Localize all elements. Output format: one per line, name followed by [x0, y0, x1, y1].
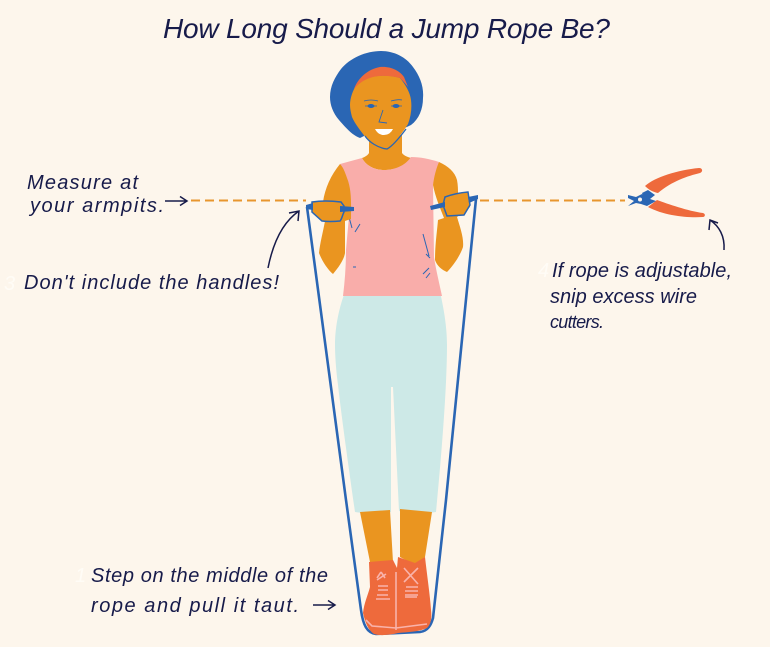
text: measure at armpits — [27, 172, 164, 217]
faint step numbers: 3 — [4, 273, 15, 295]
arrow: to armpit line — [165, 196, 187, 206]
neck — [362, 135, 411, 170]
faint step numbers — [4, 260, 549, 587]
right arm — [433, 162, 470, 272]
arrow: to handle — [268, 211, 299, 268]
text: measure at armpits: your armpits. — [28, 195, 164, 217]
nose — [379, 110, 387, 123]
text: step on rope note — [91, 565, 328, 617]
shirt — [340, 157, 442, 296]
arrow: to rope under foot — [313, 600, 335, 610]
text: step on rope note: rope and pull it taut. — [91, 595, 299, 617]
dashed measuring line — [191, 200, 625, 202]
arrow: to wire cutters — [709, 220, 724, 250]
face — [350, 76, 411, 148]
right handle and hand outline — [430, 192, 478, 216]
jump rope — [307, 199, 476, 634]
left arm — [312, 164, 351, 274]
shoes — [363, 557, 431, 635]
text: adjustable rope note: cutters. — [550, 312, 604, 332]
jaw line — [365, 129, 406, 149]
eyes and eyebrows — [364, 100, 402, 106]
text: handles note: Don't include the handles! — [24, 272, 279, 294]
text: measure at armpits: Measure at — [27, 172, 139, 194]
faint step numbers: 4 — [538, 260, 549, 282]
title: How Long Should a Jump Rope Be? — [163, 13, 610, 44]
text: step on rope note: Step on the middle of the — [91, 565, 328, 587]
legs — [360, 509, 432, 565]
hair — [330, 51, 423, 138]
figure: woman with jump rope — [306, 51, 478, 635]
icon: wire cutters — [628, 168, 705, 217]
text: adjustable rope note: If rope is adjustable, — [552, 260, 732, 282]
left handle and hand outline — [306, 201, 354, 222]
shoe laces and soles — [366, 568, 427, 630]
pants — [335, 292, 447, 514]
smile — [375, 129, 393, 135]
text: adjustable rope note — [550, 260, 732, 332]
faint step numbers: 1 — [75, 565, 86, 587]
headband — [354, 67, 408, 89]
text: adjustable rope note: snip excess wire — [550, 286, 697, 308]
shirt folds — [349, 217, 430, 278]
